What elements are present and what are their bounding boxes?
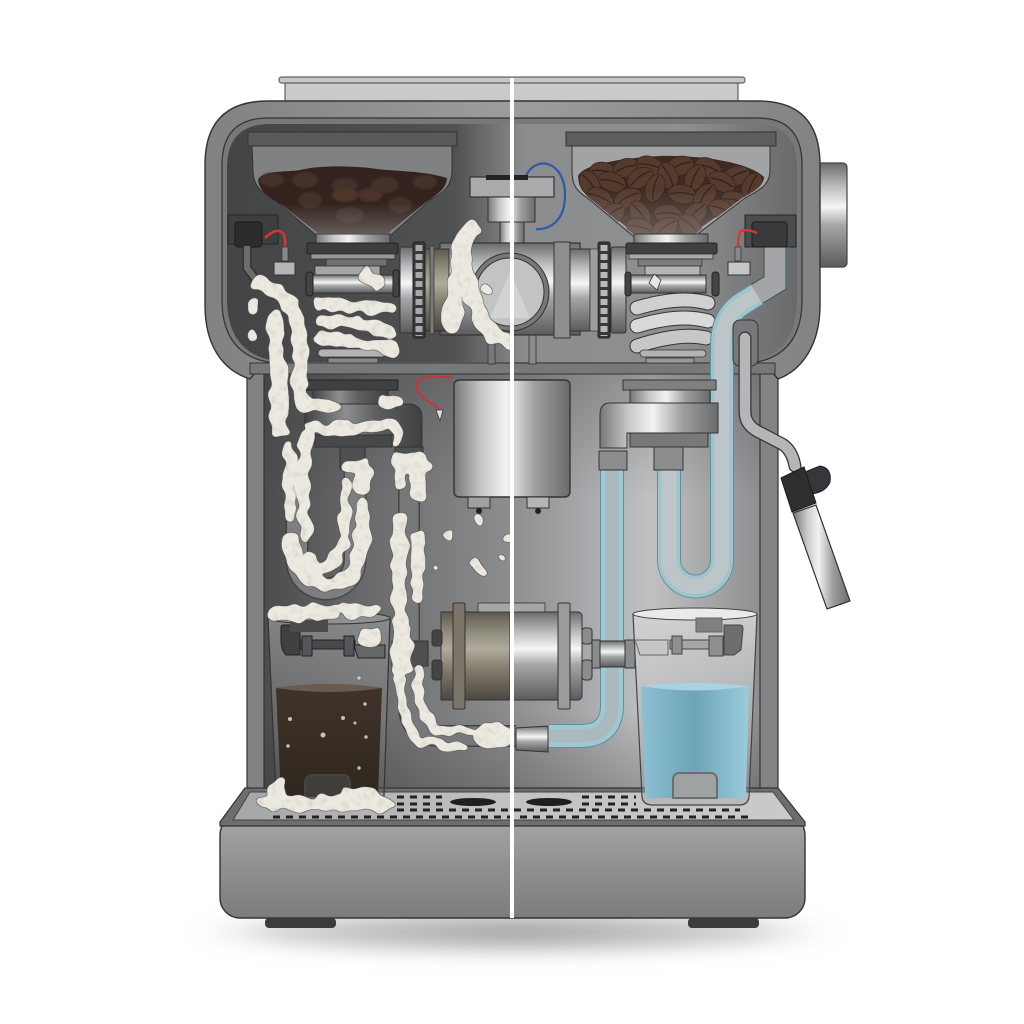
steam wand (733, 320, 850, 609)
water notch (673, 773, 717, 798)
top cup tray (279, 77, 745, 103)
foam scale deposits (250, 228, 507, 804)
left collars and gear (400, 242, 449, 338)
supports (488, 335, 495, 364)
feet (265, 918, 759, 928)
inner spout arm (281, 620, 385, 658)
main cylinder (440, 243, 580, 335)
inner spout arm (635, 618, 743, 656)
lower body shell (247, 365, 778, 800)
machine body (205, 77, 847, 800)
left hopper with dull beans (248, 132, 457, 276)
bubbles (286, 676, 368, 770)
wand handle knob (800, 466, 830, 494)
left tubing (297, 470, 516, 736)
left group head (305, 380, 423, 469)
right grinder coil (625, 272, 719, 363)
outlet connector (516, 726, 548, 752)
central valve and pipe assembly (400, 175, 626, 364)
top valve (470, 175, 554, 246)
drain holes (273, 797, 750, 817)
ground shadow (190, 908, 840, 956)
tray plate (220, 788, 805, 826)
right group head (599, 380, 718, 470)
left glass with dirty water (268, 612, 390, 803)
right hopper with clean beans (566, 132, 776, 276)
boiler tank (454, 380, 570, 514)
cup notch (305, 775, 350, 800)
blue wire (526, 164, 565, 229)
wand collar (781, 467, 816, 512)
right tubing with clear water (548, 240, 775, 736)
drip tray (220, 788, 805, 918)
left grinder coil (306, 270, 399, 363)
right collars and gear (554, 242, 626, 338)
centre divider line (510, 78, 514, 918)
tray front (220, 815, 805, 918)
upper body shell (205, 101, 820, 379)
horizontal shelf (250, 363, 775, 374)
left sensor and wire (228, 215, 295, 288)
right glass with clean water (633, 608, 757, 805)
pump motor (392, 603, 635, 709)
red wire lower (416, 377, 452, 411)
centre port (471, 253, 549, 331)
side knob (815, 163, 847, 267)
wand tip (793, 505, 850, 609)
right sensor and wire (728, 215, 796, 275)
